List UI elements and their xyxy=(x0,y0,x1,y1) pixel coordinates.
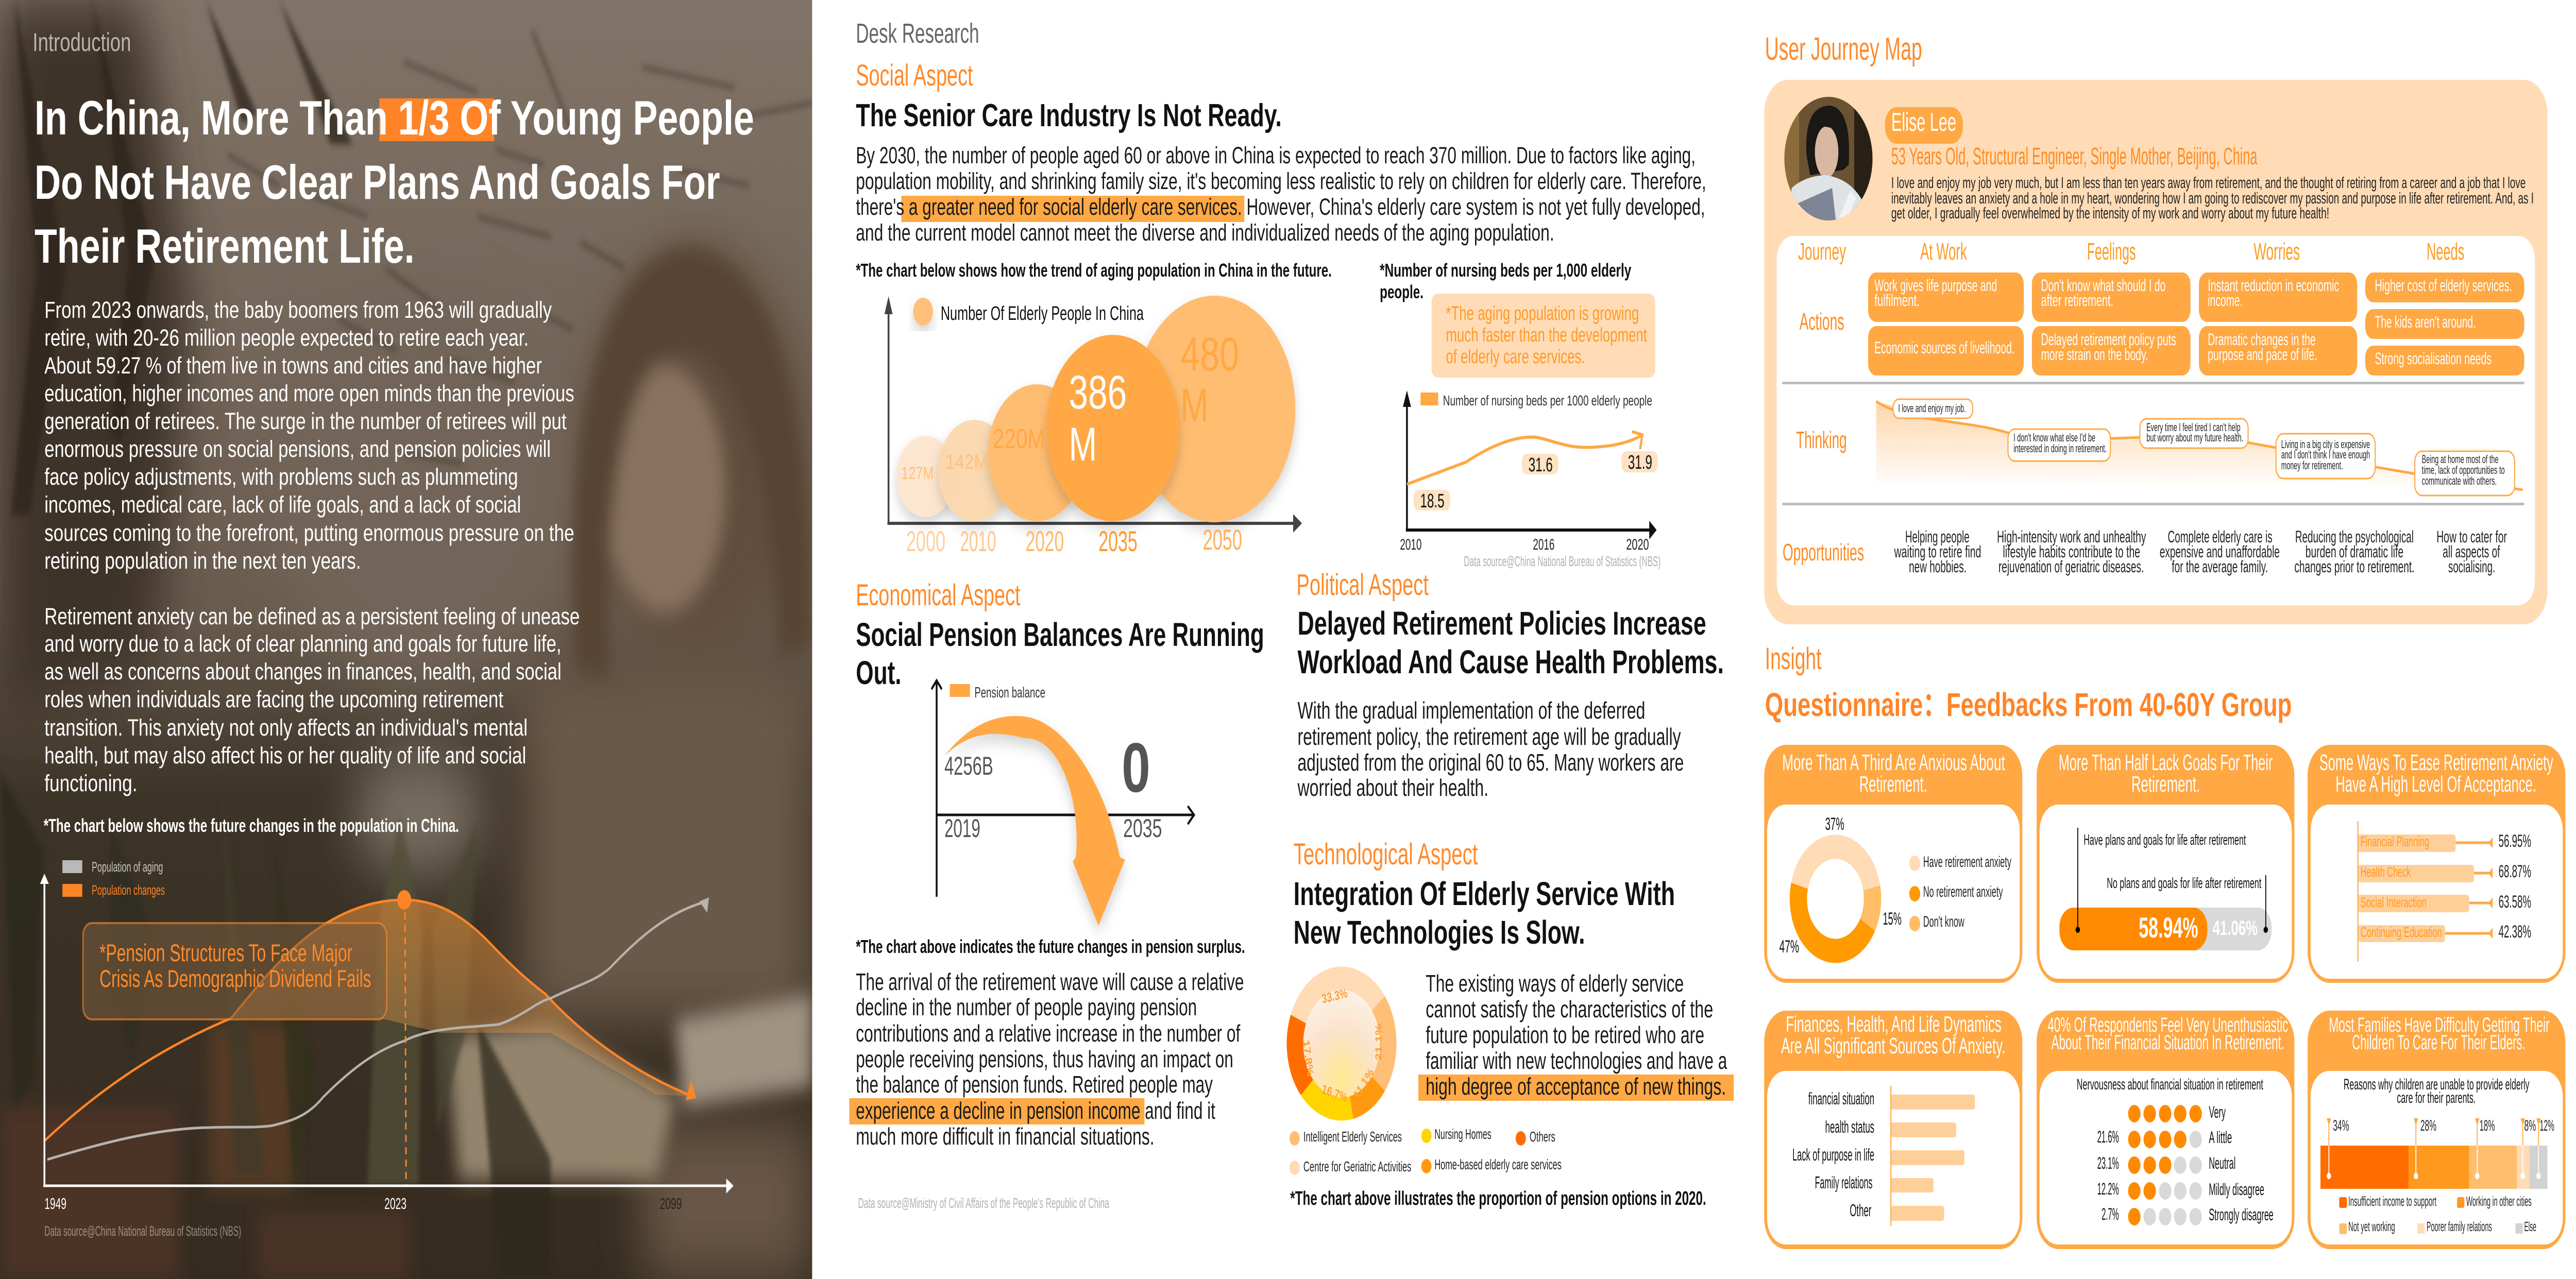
labels: donut percentages: 17.8% xyxy=(1301,1039,1316,1077)
area: population change fill xyxy=(231,900,692,1096)
text: opportunity columns: Reducing the psychological xyxy=(2295,527,2414,546)
chart: reasons stacked bar: 12% xyxy=(2539,1116,2554,1134)
labels: bubble values xyxy=(902,328,1239,483)
caption: pension: *The chart above indicates the future changes in pension surplus. xyxy=(856,936,1245,957)
line: beds trend xyxy=(1407,432,1642,484)
labels: values xyxy=(944,729,1162,843)
panel: journey table xyxy=(1777,236,2535,605)
chart: nervousness dots: Nervousness about financial situation in retirement xyxy=(2077,1075,2263,1093)
legend: reasons: Poorer family relations xyxy=(2427,1219,2492,1234)
labels: bubble values: M xyxy=(1069,418,1097,471)
text block: pension paragraph: The arrival of the retirement wave will cause a relative xyxy=(856,969,1244,995)
labels: donut percentages xyxy=(1301,985,1384,1105)
callout: pension structures xyxy=(83,923,386,1019)
card: lack goals: Retirement. xyxy=(2131,772,2200,797)
card: anxious about retirement xyxy=(1764,745,2022,983)
legend: pension: Pension balance xyxy=(974,685,1045,701)
callout: aging growth: of elderly care services. xyxy=(1446,345,1585,367)
chart: nervousness dots: 2.7% xyxy=(2102,1205,2119,1223)
caption: nursing beds xyxy=(1380,260,1632,302)
chart: anxiety donut xyxy=(1780,814,1902,963)
axis labels: 1949 xyxy=(44,1195,66,1213)
cards: actions: Dramatic changes in the xyxy=(2208,330,2316,349)
row: journey headers: Needs xyxy=(2427,239,2464,265)
chart: anxiety sources bars: Other xyxy=(1850,1201,1872,1220)
chart: pension options donut xyxy=(1281,959,1402,1129)
text block: retirement anxiety paragraph: functioning. xyxy=(44,771,138,796)
text block: retirement anxiety paragraph: transition. This anxiety not only affects an individual's mental xyxy=(44,715,528,741)
heading: User Journey Map: User Journey Map xyxy=(1765,31,1922,67)
arrow: falling balance xyxy=(944,716,1125,926)
text block: social paragraph xyxy=(856,143,1706,246)
labels: bubble values: 142M xyxy=(945,451,988,473)
chart: pension balance xyxy=(931,680,1194,926)
text block: baby boomers paragraph: education, higher incomes and more open minds than the previous xyxy=(44,381,574,406)
title: integration: New Technologies Is Slow. xyxy=(1294,914,1585,951)
chart: reasons stacked bar: 28% xyxy=(2420,1116,2436,1134)
text block: technology paragraph: familiar with new technologies and have a xyxy=(1426,1048,1727,1074)
tags: bed values: 31.6 xyxy=(1529,453,1553,475)
text block: retirement anxiety paragraph: roles when individuals are facing the upcoming retirement xyxy=(44,687,503,712)
text block: baby boomers paragraph: face policy adjustments, with problems such as plummeting xyxy=(44,465,518,490)
arrow: aging head xyxy=(700,897,709,913)
card: ways to ease anxiety xyxy=(2308,745,2565,983)
text: opportunity columns: Helping people xyxy=(1905,527,1970,546)
legend: population xyxy=(62,859,165,898)
panel: introduction photo background xyxy=(0,0,812,1279)
tags: bed values xyxy=(1414,451,1658,511)
caption: population chart: *The chart below shows the future changes in the population in China. xyxy=(44,815,459,836)
cards: actions: after retirement. xyxy=(2041,291,2113,310)
legend: pension options: Nursing Homes xyxy=(1434,1127,1492,1142)
legend: population: Population changes xyxy=(92,882,165,898)
heading: Economical Aspect: Economical Aspect xyxy=(856,578,1020,612)
bubble: at home: Being at home most of the xyxy=(2422,454,2499,466)
text block: baby boomers paragraph xyxy=(44,298,574,574)
row: journey headers: Journey xyxy=(1798,239,1846,265)
legend: anxiety: Have retirement anxiety xyxy=(1923,852,2011,871)
chart: reasons stacked bar xyxy=(2320,1075,2554,1189)
text block: pension paragraph: contributions and a relative increase in the number of xyxy=(856,1021,1241,1047)
text block: social paragraph: there's a greater need for social elderly care services. However, China's elderly care system is not yet fully developed, xyxy=(856,195,1705,220)
chart: goals progress bar: 41.06% xyxy=(2212,917,2258,940)
text block: baby boomers paragraph: retire, with 20-26 million people expected to retire each year. xyxy=(44,326,529,351)
text block: baby boomers paragraph: incomes, medical care, lack of life goals, and a lack of social xyxy=(44,492,521,518)
bubble: 2050 xyxy=(1134,296,1295,522)
chart: nervousness dots: Strongly disagree xyxy=(2209,1205,2274,1224)
callout: aging growth xyxy=(1432,294,1655,378)
axis years: 2050 xyxy=(1203,524,1242,556)
title: integration: Integration Of Elderly Service With xyxy=(1294,875,1675,912)
axis years: 2000 xyxy=(906,525,945,558)
text block: political paragraph: adjusted from the original 60 to 65. Many workers are xyxy=(1298,750,1684,776)
cards: actions: Higher cost of elderly services. xyxy=(2375,276,2512,295)
card: financial nervousness: 40% Of Respondents Feel Very Unenthusiastic xyxy=(2047,1014,2288,1036)
text: opportunity columns: How to cater for xyxy=(2436,527,2507,546)
card: lack goals: More Than Half Lack Goals For Their xyxy=(2059,750,2273,775)
axis years: 2035 xyxy=(1098,525,1138,558)
title: pension balances: Out. xyxy=(856,654,902,691)
chart: nervousness dots: 21.6% xyxy=(2097,1128,2119,1146)
chart: thinking emotion curve xyxy=(1876,399,2523,496)
text block: baby boomers paragraph: sources coming to the forefront, putting enormous pressure on the xyxy=(44,521,574,546)
chart: population line chart xyxy=(40,859,734,1213)
text block: retirement anxiety paragraph: health, but may also affect his or her quality of life and social xyxy=(44,743,526,769)
title: main headline: In China, More Than 1/3 Of Young People xyxy=(35,91,754,145)
legend: elderly xyxy=(913,298,1144,326)
axis years: 2010 xyxy=(960,525,996,558)
legend: anxiety: Don't know xyxy=(1923,912,1964,930)
chart: nervousness dots: Mildly disagree xyxy=(2209,1180,2264,1199)
text block: political paragraph xyxy=(1297,698,1684,801)
chart: ease methods bars: Continuing Education xyxy=(2361,925,2442,941)
text block: retirement anxiety paragraph: and worry due to a lack of clear planning and goals for future life, xyxy=(44,632,562,657)
callout: aging growth: much faster than the development xyxy=(1446,323,1647,346)
title: pension balances: Social Pension Balances Are Running xyxy=(856,616,1264,653)
source note: civil affairs: Data source@Ministry of Civil Affairs of the People's Republic of China xyxy=(858,1196,1109,1212)
chart: anxiety donut: 47% xyxy=(1780,937,1799,957)
chart: ease methods bars: Social Interaction xyxy=(2361,895,2427,911)
bubble: at home: communicate with others. xyxy=(2422,475,2497,488)
chart: nervousness dots: A little xyxy=(2209,1128,2232,1147)
legend: reasons: Insufficient income to support xyxy=(2348,1194,2437,1209)
text: opportunity columns: changes prior to retirement. xyxy=(2294,557,2414,576)
cards: actions: Work gives life purpose and xyxy=(1874,276,1997,295)
text block: technology paragraph xyxy=(1426,971,1727,1100)
row: journey headers: Worries xyxy=(2253,239,2300,265)
title: senior care: The Senior Care Industry Is Not Ready. xyxy=(856,98,1282,133)
cards: actions: Strong socialisation needs xyxy=(2375,349,2492,368)
text: opportunity columns: waiting to retire find xyxy=(1894,542,1981,561)
labels: bubble values: 480 xyxy=(1180,328,1239,381)
text: opportunity columns: High-intensity work and unhealthy xyxy=(1997,527,2146,546)
legend: pension options: Centre for Geriatric Activities xyxy=(1303,1159,1411,1175)
chart: reasons stacked bar: care for their parents. xyxy=(2397,1088,2476,1106)
text: opportunity columns: new hobbies. xyxy=(1909,557,1967,576)
legend: reasons: Else xyxy=(2524,1219,2536,1234)
chart: nervousness dots: 23.1% xyxy=(2097,1154,2119,1172)
labels: bubble values: 220M xyxy=(993,423,1045,454)
panel: social aspect xyxy=(856,58,1706,570)
chart: ease methods bars: 68.87% xyxy=(2499,862,2531,881)
text: opportunity columns: all aspects of xyxy=(2443,542,2500,561)
chart: goals progress bar: Have plans and goals for life after retirement xyxy=(2083,832,2246,848)
card: children caring for elders xyxy=(2308,1011,2565,1249)
text block: pension paragraph: much more difficult in financial situations. xyxy=(856,1124,1155,1150)
card: sources of anxiety: Are All Significant Sources Of Anxiety. xyxy=(1781,1033,2006,1059)
line: population of aging xyxy=(47,901,707,1159)
legend: beds: Number of nursing beds per 1000 elderly people xyxy=(1443,393,1652,409)
label: Actions: Actions xyxy=(1800,309,1844,335)
legend: reasons xyxy=(2339,1194,2536,1234)
text block: baby boomers paragraph: enormous pressure on social pensions, and pension policies will xyxy=(44,437,551,462)
highlight xyxy=(849,1098,1144,1124)
text block: persona quote xyxy=(1891,174,2534,222)
caption: nursing beds: people. xyxy=(1380,282,1423,302)
text: persona details: 53 Years Old, Structural Engineer, Single Mother, Beijing, China xyxy=(1891,144,2258,169)
bubble: 2035 xyxy=(1046,335,1179,521)
legend: reasons: Not yet working xyxy=(2348,1219,2395,1234)
text block: pension paragraph: people receiving pensions, thus having an impact on xyxy=(856,1047,1233,1072)
title: delayed retirement: Workload And Cause Health Problems. xyxy=(1298,643,1724,680)
card: lack goals xyxy=(2037,745,2294,983)
axis labels: 2023 xyxy=(384,1195,406,1213)
chart: anxiety sources bars: Lack of purpose in life xyxy=(1792,1146,1874,1165)
text block: technology paragraph: future population to be retired who are xyxy=(1426,1022,1704,1048)
legend: population: Population of aging xyxy=(92,859,163,875)
cards: actions: Don't know what should I do xyxy=(2041,276,2165,295)
text: opportunity columns: expensive and unaffordable xyxy=(2160,542,2280,561)
chart: nervousness dots: Very xyxy=(2209,1103,2226,1121)
caption: proportions: *The chart above illustrates the proportion of pension options in 2020. xyxy=(1290,1187,1706,1209)
text block: retirement anxiety paragraph: Retirement anxiety can be defined as a persistent feeling of unease xyxy=(44,604,580,629)
bubble: tired: but worry about my future health. xyxy=(2146,432,2243,445)
heading: Introduction: Introduction xyxy=(32,28,131,57)
chart: ease methods bars xyxy=(2358,821,2531,962)
text block: political paragraph: worried about their health. xyxy=(1297,775,1488,801)
label: Thinking: Thinking xyxy=(1796,428,1847,453)
panel: economical aspect xyxy=(849,578,1264,1212)
label: persona name: Elise Lee xyxy=(1891,108,1956,137)
bubble: what else xyxy=(2008,429,2110,461)
legend: elderly: Number Of Elderly People In China xyxy=(941,302,1144,324)
labels: donut percentages: 11.1% xyxy=(1351,1065,1376,1102)
legend: pension options: Others xyxy=(1530,1129,1555,1145)
chart: ease methods bars: Health Check xyxy=(2361,864,2411,880)
caption: bubble chart: *The chart below shows how the trend of aging population in China in the future. xyxy=(856,260,1332,281)
text block: baby boomers paragraph: About 59.27 % of them live in towns and cities and have higher xyxy=(44,353,542,379)
chart: ease methods bars: 42.38% xyxy=(2499,922,2531,942)
text block: social paragraph: population mobility, and shrinking family size, it's becoming less realistic to rely on children for elderly care. Therefore, xyxy=(856,169,1706,194)
text block: political paragraph: retirement policy, the retirement age will be gradually xyxy=(1298,724,1681,750)
labels: values: 2019 xyxy=(944,814,980,843)
text: opportunity columns xyxy=(1894,527,2507,576)
legend: pension xyxy=(950,684,1045,701)
axis years: 2020 xyxy=(1025,525,1064,558)
highlight xyxy=(1418,1075,1734,1101)
title: main headline: Do Not Have Clear Plans And Goals For xyxy=(35,156,720,210)
card: sources of anxiety: Finances, Health, And Life Dynamics xyxy=(1786,1012,2002,1037)
text: opportunity columns: for the average family. xyxy=(2172,557,2268,576)
axes xyxy=(885,296,1302,533)
chart: goals progress bar xyxy=(2059,828,2272,950)
card: children caring for elders: Children To Care For Their Elders. xyxy=(2352,1031,2526,1054)
axis years xyxy=(1400,535,1649,553)
title: main headline: Their Retirement Life. xyxy=(35,219,415,274)
cards: actions: fulfilment. xyxy=(1874,291,1920,310)
text block: social paragraph: By 2030, the number of people aged 60 or above in China is expected to reach 370 million. Due to factors like aging, xyxy=(856,143,1696,168)
bubble: 2010 xyxy=(938,420,1011,522)
heading: Insight: Insight xyxy=(1765,642,1822,676)
cards: actions: Economic sources of livelihood. xyxy=(1874,338,2014,357)
chart: nervousness dots: 12.2% xyxy=(2097,1180,2119,1198)
cards: actions: Instant reduction in economic xyxy=(2208,276,2339,295)
axis labels: 2099 xyxy=(660,1195,682,1213)
text block: pension paragraph: experience a decline in pension income and find it xyxy=(856,1098,1215,1124)
text: opportunity columns: rejuvenation of geriatric diseases. xyxy=(1998,557,2144,576)
row: journey headers: At Work xyxy=(1920,239,1967,265)
labels: donut percentages: 33.3% xyxy=(1321,985,1348,1007)
card: financial nervousness: About Their Financial Situation In Retirement. xyxy=(2052,1031,2284,1054)
chart: goals progress bar: No plans and goals for life after retirement xyxy=(2107,875,2261,892)
cards: actions: Delayed retirement policy puts xyxy=(2041,330,2176,349)
title: pension balances xyxy=(856,616,1264,691)
heading: Political Aspect: Political Aspect xyxy=(1296,568,1429,602)
text block: social paragraph: and the current model cannot meet the diverse and individualized needs of the aging population. xyxy=(856,220,1554,246)
labels: bubble values: 127M xyxy=(902,464,934,483)
arrow: population changes head xyxy=(686,1080,696,1100)
axis years: 2020 xyxy=(1626,535,1649,553)
bubble: big city: Living in a big city is expensive xyxy=(2281,439,2370,451)
line: population changes xyxy=(44,900,692,1141)
bubble: 2000 xyxy=(896,436,955,517)
chart: anxiety sources bars: financial situation xyxy=(1808,1089,1874,1109)
bubble: love job: I love and enjoy my job. xyxy=(1898,403,1966,415)
chart: anxiety sources bars: Family relations xyxy=(1815,1173,1873,1192)
callout: pension structures: *Pension Structures To Face Major xyxy=(99,939,352,966)
chart: anxiety donut: 37% xyxy=(1825,814,1844,834)
labels: donut percentages: 16.7% xyxy=(1321,1081,1349,1105)
labels: bubble values: 386 xyxy=(1069,366,1127,419)
chart: ease methods bars: Financial Planning xyxy=(2361,834,2429,850)
chart: ease methods bars: 56.95% xyxy=(2499,831,2531,851)
legend: pension options: Intelligent Elderly Services xyxy=(1303,1129,1402,1145)
legend: pension options xyxy=(1290,1127,1562,1175)
chart: elderly bubbles xyxy=(885,296,1302,558)
text block: baby boomers paragraph: From 2023 onwards, the baby boomers from 1963 will gradually xyxy=(44,298,552,323)
axis years: 2016 xyxy=(1533,535,1554,553)
chart: anxiety donut: 15% xyxy=(1883,909,1902,929)
title: delayed retirement: Delayed Retirement Policies Increase xyxy=(1298,605,1706,642)
bubble: big city xyxy=(2276,434,2375,479)
text block: baby boomers paragraph: retiring population in the next ten years. xyxy=(44,549,361,574)
chart: goals progress bar: 58.94% xyxy=(2139,912,2198,944)
tags: bed values: 31.9 xyxy=(1628,451,1652,473)
title: questionnaire: Questionnaire：Feedbacks From 40-60Y Group xyxy=(1765,686,2292,723)
text block: retirement anxiety paragraph xyxy=(44,604,580,796)
card: sources of anxiety xyxy=(1764,1011,2022,1249)
chart: anxiety sources bars xyxy=(1792,1086,1975,1226)
cards: actions: income. xyxy=(2208,291,2243,310)
legend: anxiety: No retirement anxiety xyxy=(1923,882,2003,900)
labels: bubble values: M xyxy=(1180,379,1209,432)
cards: actions: purpose and pace of life. xyxy=(2208,345,2317,364)
chart: reasons stacked bar: 34% xyxy=(2333,1116,2349,1134)
tags: bed values: 18.5 xyxy=(1420,489,1445,511)
heading: Social Aspect: Social Aspect xyxy=(856,58,973,92)
chart: nursing beds xyxy=(1400,390,1658,553)
panel: technological aspect xyxy=(1281,837,1734,1209)
highlight xyxy=(902,196,1244,222)
row: journey headers: Feelings xyxy=(2087,239,2136,265)
text block: pension paragraph xyxy=(856,969,1244,1150)
panel: political aspect xyxy=(1296,568,1724,801)
bubble: love job xyxy=(1893,399,1973,418)
axis years: 2010 xyxy=(1400,535,1421,553)
label: Opportunities: Opportunities xyxy=(1783,540,1864,566)
panel: user journey map xyxy=(1764,80,2547,624)
labels: values: 0 xyxy=(1122,729,1150,807)
bubble: at home: time, lack of opportunities to xyxy=(2422,465,2505,477)
text block: retirement anxiety paragraph: as well as concerns about changes in finances, health, and social xyxy=(44,659,562,685)
chart: ease methods bars: 63.58% xyxy=(2499,892,2531,912)
text block: pension paragraph: the balance of pension funds. Retired people may xyxy=(856,1072,1213,1098)
text block: persona quote: get older, I gradually feel overwhelmed by the intensity of my work and worry about my future health! xyxy=(1891,204,2329,222)
text: opportunity columns: burden of dramatic life xyxy=(2306,542,2403,561)
legend: reasons: Working in other cities xyxy=(2466,1194,2532,1209)
bubble: what else: interested in doing in retirement. xyxy=(2013,443,2107,455)
bubble: big city: money for retirement. xyxy=(2281,460,2343,472)
cards: actions: more strain on the body. xyxy=(2041,345,2148,364)
text: opportunity columns: lifestyle habits contribute to the xyxy=(2003,542,2140,561)
chart: nervousness dots xyxy=(2077,1075,2274,1225)
card: anxious about retirement: Retirement. xyxy=(1859,772,1927,797)
axes xyxy=(40,874,734,1193)
axis labels xyxy=(44,1195,682,1213)
text block: pension paragraph: decline in the number of people paying pension xyxy=(856,995,1197,1020)
callout: aging growth: *The aging population is growing xyxy=(1446,302,1639,324)
line: 2023 marker xyxy=(397,890,411,1186)
legend: pension options: Home-based elderly care services xyxy=(1434,1157,1562,1173)
title: main headline xyxy=(35,91,754,274)
bubble: tired: Every time I feel tired I can't help xyxy=(2146,422,2241,434)
caption: nursing beds: *Number of nursing beds per 1,000 elderly xyxy=(1380,260,1632,281)
heading: Technological Aspect: Technological Aspect xyxy=(1294,837,1478,871)
card: financial nervousness xyxy=(2037,1011,2294,1249)
bubble: at home xyxy=(2415,451,2515,496)
label: persona name xyxy=(1885,107,1963,144)
text: opportunity columns: Complete elderly care is xyxy=(2168,527,2273,546)
card: ways to ease anxiety: Have A High Level Of Acceptance. xyxy=(2335,772,2536,797)
chart: anxiety sources bars: health status xyxy=(1825,1118,1874,1137)
bubble: what else: I don't know what else I'd be xyxy=(2013,432,2095,445)
text: opportunity columns: socialising. xyxy=(2448,557,2495,576)
text block: baby boomers paragraph: generation of retirees. The surge in the number of retirees will put xyxy=(44,409,567,434)
text block: technology paragraph: The existing ways of elderly service xyxy=(1426,971,1684,997)
text block: political paragraph: With the gradual implementation of the deferred xyxy=(1298,698,1645,724)
labels: donut percentages: 21.1% xyxy=(1373,1024,1384,1060)
bubble: tired xyxy=(2140,419,2248,448)
text block: technology paragraph: high degree of acceptance of new things. xyxy=(1426,1074,1726,1100)
title: delayed retirement xyxy=(1298,605,1724,680)
axes xyxy=(931,680,1194,897)
bubble: big city: and I don't think I have enough xyxy=(2281,449,2370,462)
title: integration xyxy=(1294,875,1675,951)
source note: nursing: Data source@China National Bureau of Statistics (NBS) xyxy=(1464,554,1660,570)
bubble: 2020 xyxy=(988,384,1086,521)
text block: technology paragraph: cannot satisfy the characteristics of the xyxy=(1426,997,1713,1022)
row: journey headers xyxy=(1798,239,2464,265)
axis years xyxy=(906,524,1242,558)
callout: pension structures: Crisis As Demographic Dividend Fails xyxy=(99,965,371,992)
source note: population: Data source@China National Bureau of Statistics (NBS) xyxy=(44,1223,241,1239)
icon: persona photo xyxy=(1785,97,1873,220)
axes xyxy=(1403,390,1657,539)
legend: anxiety xyxy=(1909,852,2011,931)
chart: nervousness dots: Neutral xyxy=(2209,1154,2235,1172)
chart: reasons stacked bar: 8% xyxy=(2524,1116,2536,1134)
cards: actions: The kids aren't around. xyxy=(2375,313,2476,331)
heading: Desk Research: Desk Research xyxy=(856,18,979,49)
cards: actions xyxy=(1868,272,2524,376)
labels: values: 4256B xyxy=(944,752,993,781)
chart: reasons stacked bar: 18% xyxy=(2480,1116,2495,1134)
labels: values: 2035 xyxy=(1123,814,1162,843)
card: anxious about retirement: More Than A Third Are Anxious About xyxy=(1782,750,2005,775)
